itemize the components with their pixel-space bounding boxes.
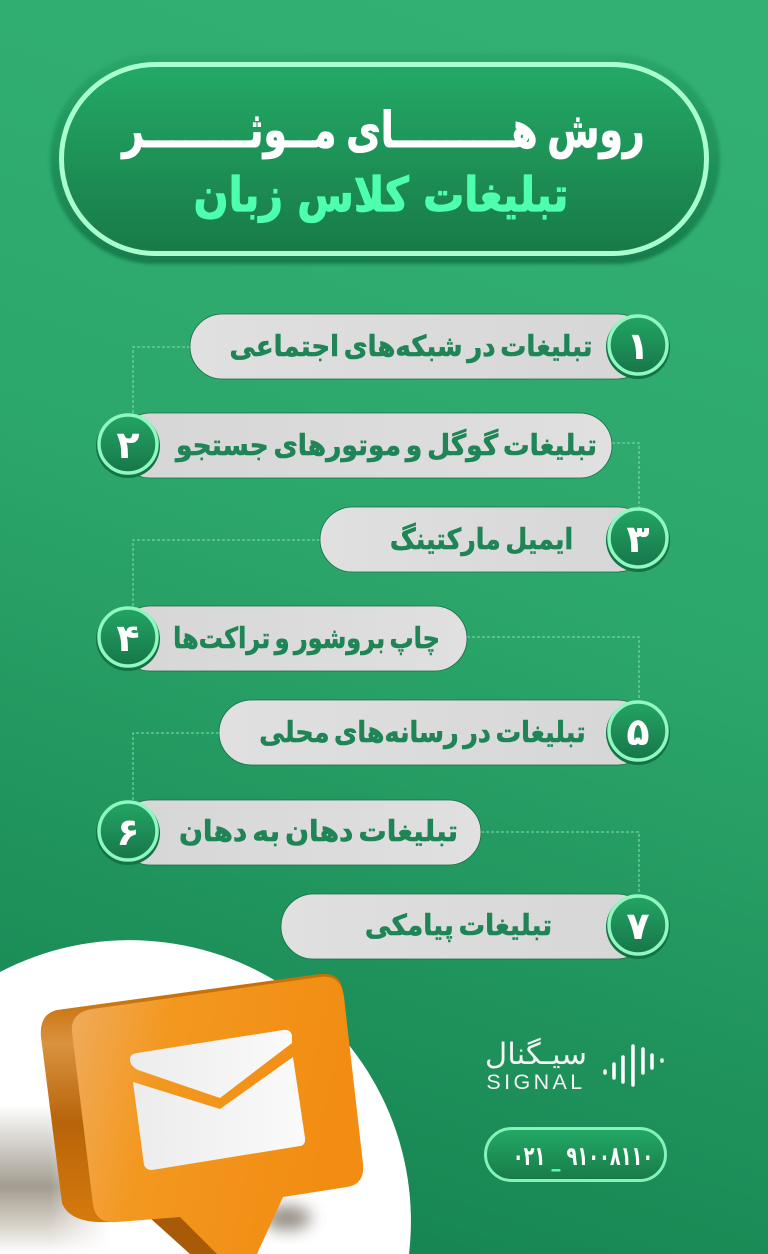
item 1 (190, 314, 670, 379)
logo: signal (485, 1038, 662, 1094)
item 5 (219, 700, 670, 765)
item 7: ۷ (626, 904, 650, 948)
item 1: ۱ (626, 324, 650, 368)
item 4: چاپ بروشور و تراکت‌ها (173, 622, 440, 656)
item 7 (281, 894, 670, 959)
item 5: ۵ (626, 710, 650, 754)
bubble back and side (41, 974, 360, 1222)
item 7: تبلیغات پیامکی (365, 908, 552, 942)
title banner (50, 54, 720, 264)
phone pill (486, 1128, 666, 1180)
white circle backdrop (0, 940, 411, 1254)
item 1: تبلیغات در شبکه‌های اجتماعی (230, 331, 592, 363)
item 6 (96, 800, 481, 865)
logo wordmark: سیـگنال (485, 1038, 587, 1072)
item 6: ۶ (116, 810, 140, 854)
title line 1: روش هـــــــــای مــوثــــــــر (121, 102, 645, 159)
item 3: ۳ (626, 517, 650, 561)
envelope body (133, 1057, 305, 1170)
logo wordmark: SIGNAL (486, 1070, 586, 1094)
phone pill: ۰۲۱ _ ۹۱۰۰۸۱۱۰ (513, 1142, 653, 1172)
icon: orange email speech bubble (41, 974, 363, 1254)
logo wordmark (485, 1038, 587, 1094)
envelope flap (130, 1030, 292, 1098)
item 4 (96, 606, 467, 671)
item 6: تبلیغات دهان به دهان (179, 815, 458, 848)
item 2 (96, 413, 612, 478)
item 3 (320, 507, 670, 572)
logo sound bars (605, 1046, 662, 1085)
item 5: تبلیغات در رسانه‌های محلی (259, 717, 586, 749)
item 2: ۲ (116, 423, 140, 467)
title line 2: تبلیغات کلاس زبان (194, 168, 568, 223)
item 2: تبلیغات گوگل و موتورهای جستجو (174, 428, 597, 462)
item 4: ۴ (116, 616, 140, 660)
connector lines (133, 347, 639, 894)
item 3: ایمیل مارکتینگ (390, 522, 573, 556)
bubble front (72, 977, 363, 1254)
